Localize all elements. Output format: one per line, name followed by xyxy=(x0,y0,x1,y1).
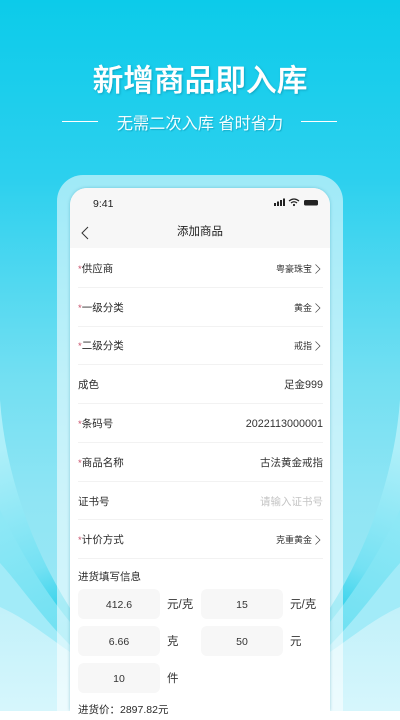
row: pricing method xyxy=(78,534,320,546)
phone frame xyxy=(57,175,343,711)
input grid: 15 xyxy=(236,599,248,611)
input grid: 件 xyxy=(167,673,178,685)
row: supplier xyxy=(78,263,320,275)
subtitle with side lines: 无需二次入库 省时省力 xyxy=(117,115,283,133)
row: pricing method: *计价方式 xyxy=(78,534,124,546)
row: product name: 古法黄金戒指 xyxy=(260,457,323,469)
row: product name xyxy=(78,457,323,469)
row: purity: 足金999 xyxy=(284,379,323,391)
purchase info heading: 进货填写信息 xyxy=(78,571,141,583)
input grid: 10 xyxy=(113,673,125,685)
status icons xyxy=(274,198,318,206)
row: barcode: *条码号 xyxy=(78,418,113,430)
input grid xyxy=(106,598,316,685)
title: 新增商品即入库 xyxy=(93,63,307,98)
input grid: 50 xyxy=(236,636,248,648)
input grid: 412.6 xyxy=(106,599,132,611)
row: supplier: *供应商 xyxy=(78,263,113,275)
row: level 1 category: 黄金 xyxy=(294,303,312,313)
row: level 1 category: *一级分类 xyxy=(78,302,124,314)
input grid: 元/克 xyxy=(290,599,316,611)
row: supplier: 粤豪珠宝 xyxy=(276,264,312,274)
row: level 2 category: *二级分类 xyxy=(78,340,124,352)
row: barcode xyxy=(78,418,323,430)
row: certificate: 请输入证书号 xyxy=(260,496,323,508)
input grid: 6.66 xyxy=(109,636,129,648)
back arrow xyxy=(81,226,88,240)
input grid: 元 xyxy=(290,636,302,648)
app header xyxy=(70,188,330,248)
row: barcode: 2022113000001 xyxy=(246,418,323,430)
row: pricing method: 克重黄金 xyxy=(276,535,312,545)
screen title: 添加商品 xyxy=(177,226,223,238)
row: level 2 category xyxy=(78,340,320,352)
input grid: 元/克 xyxy=(167,599,193,611)
row: level 2 category: 戒指 xyxy=(294,341,312,351)
purchase price: 进货价：2897.82元 xyxy=(78,704,168,716)
row: level 1 category xyxy=(78,302,320,314)
row: purity xyxy=(78,379,323,391)
input grid: 克 xyxy=(167,636,178,648)
status time: 9:41 xyxy=(93,198,113,210)
phone screen xyxy=(70,188,330,711)
row: certificate: 证书号 xyxy=(78,496,110,508)
row: certificate xyxy=(78,496,323,508)
row: purity: 成色 xyxy=(78,379,99,391)
row: product name: *商品名称 xyxy=(78,457,124,469)
